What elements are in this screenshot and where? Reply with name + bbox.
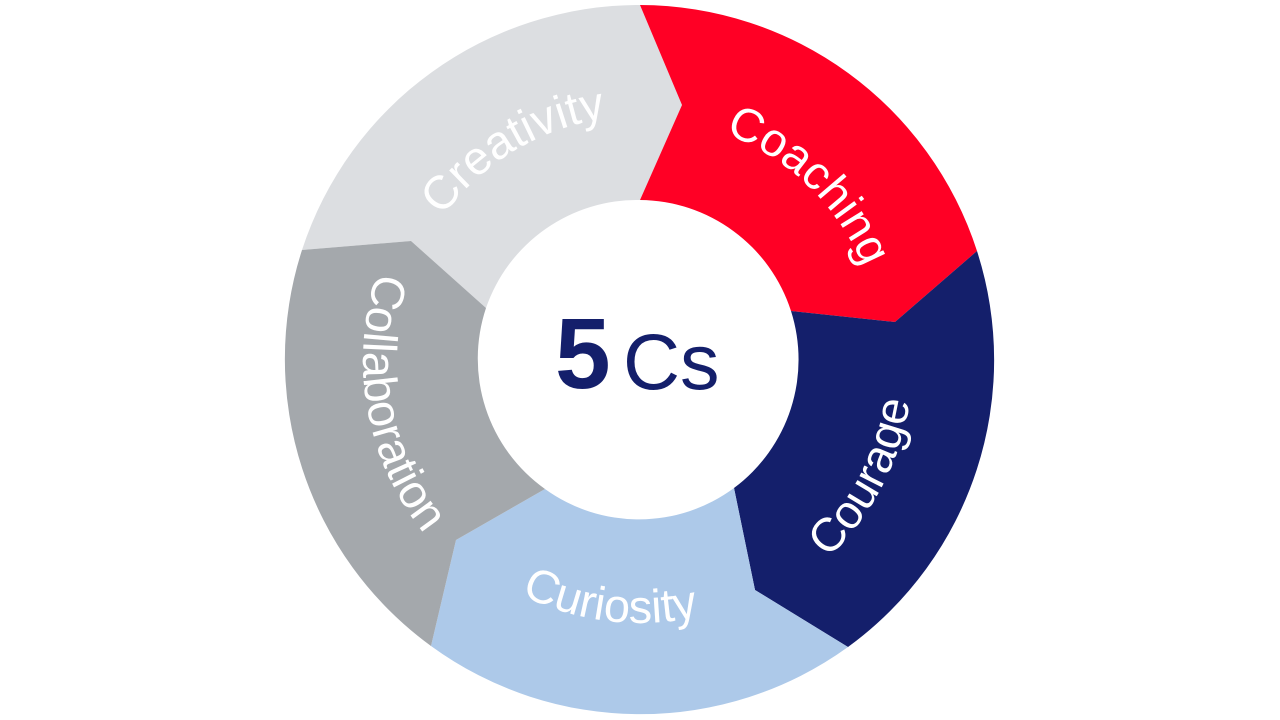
label: Creativity: Creativity xyxy=(424,94,602,209)
label: Collaboration: Collaboration xyxy=(362,278,440,532)
segment: Coaching xyxy=(640,5,977,322)
label: Curiosity: Curiosity xyxy=(527,570,694,630)
segment: Creativity xyxy=(302,5,682,308)
segment: Curiosity xyxy=(431,488,848,714)
center title: 5 Cs: Cs xyxy=(623,317,720,406)
label: Courage: Courage xyxy=(812,400,911,551)
segment: Courage xyxy=(734,251,994,647)
center title: 5 Cs: 5 xyxy=(555,298,611,410)
center title: 5 Cs xyxy=(555,298,720,410)
segment: Collaboration xyxy=(284,241,545,646)
label: Coaching: Coaching xyxy=(732,108,885,266)
